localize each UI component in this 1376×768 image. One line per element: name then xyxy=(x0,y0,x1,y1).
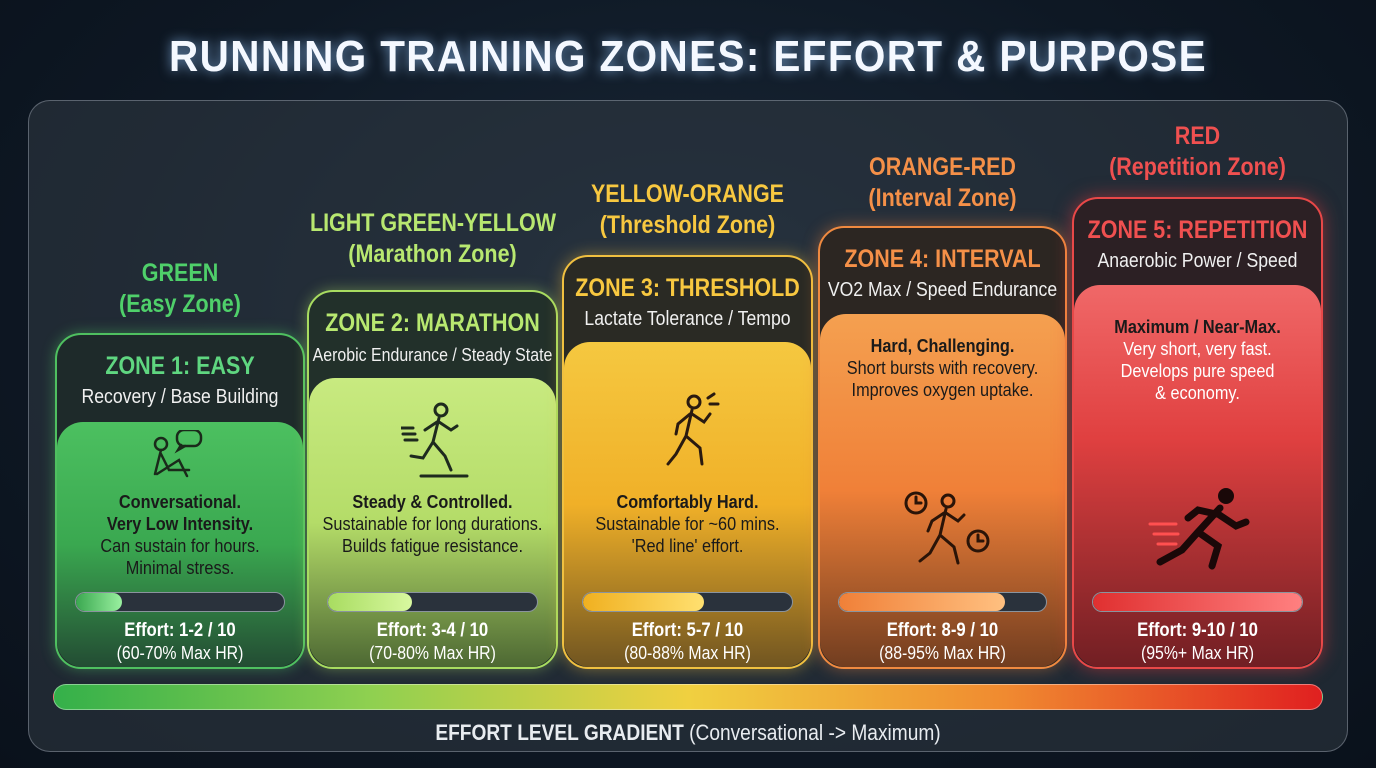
label: yellow-orange: (Threshold Zone) xyxy=(600,211,775,239)
zone 5 description xyxy=(1114,316,1281,403)
zone 5 subtitle: Anaerobic Power / Speed xyxy=(1098,249,1297,272)
label: light green-yellow xyxy=(310,209,556,268)
zone 2 effort xyxy=(369,620,496,663)
zone 1 heading: ZONE 1: EASY xyxy=(105,352,255,380)
label: light green-yellow: (Marathon Zone) xyxy=(348,240,517,268)
zone 4 effort xyxy=(879,620,1006,663)
zone 5 heading: ZONE 5: REPETITION xyxy=(1088,216,1307,244)
zone 4 heading: ZONE 4: INTERVAL xyxy=(844,245,1041,273)
zone 2 effort: (70-80% Max HR) xyxy=(369,643,496,663)
zone 3 effort xyxy=(624,620,751,663)
zone 3 effort: Effort: 5-7 / 10 xyxy=(632,620,743,641)
zone 1 description xyxy=(100,491,260,578)
zone 4 subtitle: VO2 Max / Speed Endurance xyxy=(828,278,1057,301)
zone 2 heading: ZONE 2: MARATHON xyxy=(325,309,540,337)
zone 4 effort: (88-95% Max HR) xyxy=(879,643,1006,663)
zone 3 description xyxy=(595,491,780,556)
zone 1 subtitle: Recovery / Base Building xyxy=(82,385,278,408)
gradient caption: EFFORT LEVEL GRADIENT (Conversational -> Maximum) xyxy=(435,720,941,745)
label: red: RED xyxy=(1175,122,1220,150)
zone 1 inner panel xyxy=(57,422,303,667)
zone 4 description: Short bursts with recovery. xyxy=(847,357,1038,378)
label: red: (Repetition Zone) xyxy=(1109,153,1286,181)
zone 5 description: Maximum / Near-Max. xyxy=(1114,316,1281,337)
label: green: (Easy Zone) xyxy=(119,290,241,318)
icon: runner xyxy=(666,392,720,466)
zone 3 effort bar xyxy=(582,592,793,612)
zone 4 effort bar xyxy=(838,592,1047,612)
zone 3 card xyxy=(562,255,813,669)
icon: sitting person xyxy=(154,430,202,478)
label: orange-red: ORANGE-RED xyxy=(869,153,1016,181)
zone 1 card xyxy=(55,333,305,669)
zone 5 description: Very short, very fast. xyxy=(1123,338,1272,359)
zone 1 effort xyxy=(117,620,243,663)
icon: runner xyxy=(401,402,468,478)
zone 2 effort bar xyxy=(327,592,538,612)
zone 5 effort: Effort: 9-10 / 10 xyxy=(1137,620,1258,641)
zone 2 subtitle: Aerobic Endurance / Steady State xyxy=(313,344,552,365)
zone 2 inner panel xyxy=(309,378,556,667)
zone 1 description: Minimal stress. xyxy=(126,557,234,578)
zone 1 effort: Effort: 1-2 / 10 xyxy=(124,620,236,641)
zone 1 description: Conversational. xyxy=(119,491,241,512)
title: RUNNING TRAINING ZONES: EFFORT & PURPOSE xyxy=(169,32,1207,81)
zone 5 inner panel xyxy=(1074,285,1321,667)
zone 4 card xyxy=(818,226,1067,669)
zone 2 card xyxy=(307,290,558,669)
zone 2 description xyxy=(323,491,542,556)
zone 5 effort bar xyxy=(1092,592,1303,612)
zone 3 subtitle: Lactate Tolerance / Tempo xyxy=(584,307,791,330)
zone 5 effort xyxy=(1137,620,1258,663)
zone 3 effort: (80-88% Max HR) xyxy=(624,643,751,663)
zone 5 description: Develops pure speed xyxy=(1121,360,1274,381)
zone 1 effort: (60-70% Max HR) xyxy=(117,643,243,663)
zone 4 description xyxy=(847,335,1038,400)
zone 5 description: & economy. xyxy=(1155,382,1240,403)
zone 3 description: Sustainable for ~60 mins. xyxy=(595,513,780,534)
zone 1 description: Very Low Intensity. xyxy=(107,513,253,534)
zone 3 description: 'Red line' effort. xyxy=(632,535,743,556)
zone 2 description: Builds fatigue resistance. xyxy=(342,535,523,556)
zone 4 description: Hard, Challenging. xyxy=(871,335,1014,356)
label: orange-red xyxy=(868,153,1017,212)
label: red xyxy=(1109,122,1286,181)
zone 5 card xyxy=(1072,197,1323,669)
zone 3 description: Comfortably Hard. xyxy=(616,491,759,512)
effort gradient bar xyxy=(53,684,1323,710)
label: yellow-orange xyxy=(591,180,784,239)
zone 2 effort: Effort: 3-4 / 10 xyxy=(377,620,488,641)
zone 5 effort: (95%+ Max HR) xyxy=(1141,643,1254,663)
label: green: GREEN xyxy=(142,259,218,287)
zone 4 inner panel xyxy=(820,314,1065,667)
zone 2 description: Sustainable for long durations. xyxy=(323,513,542,534)
zone 3 inner panel xyxy=(564,342,811,667)
icon: runner with clocks xyxy=(904,492,990,564)
label: green xyxy=(119,259,241,318)
label: yellow-orange: YELLOW-ORANGE xyxy=(591,180,784,208)
zone 2 description: Steady & Controlled. xyxy=(352,491,513,512)
zone 4 description: Improves oxygen uptake. xyxy=(852,379,1033,400)
zone 1 effort bar xyxy=(75,592,285,612)
zone 4 effort: Effort: 8-9 / 10 xyxy=(887,620,998,641)
label: light green-yellow: LIGHT GREEN-YELLOW xyxy=(310,209,556,237)
zone 1 description: Can sustain for hours. xyxy=(100,535,260,556)
icon: sprinter xyxy=(1148,488,1250,570)
zone 3 heading: ZONE 3: THRESHOLD xyxy=(575,274,800,302)
label: orange-red: (Interval Zone) xyxy=(868,184,1017,212)
